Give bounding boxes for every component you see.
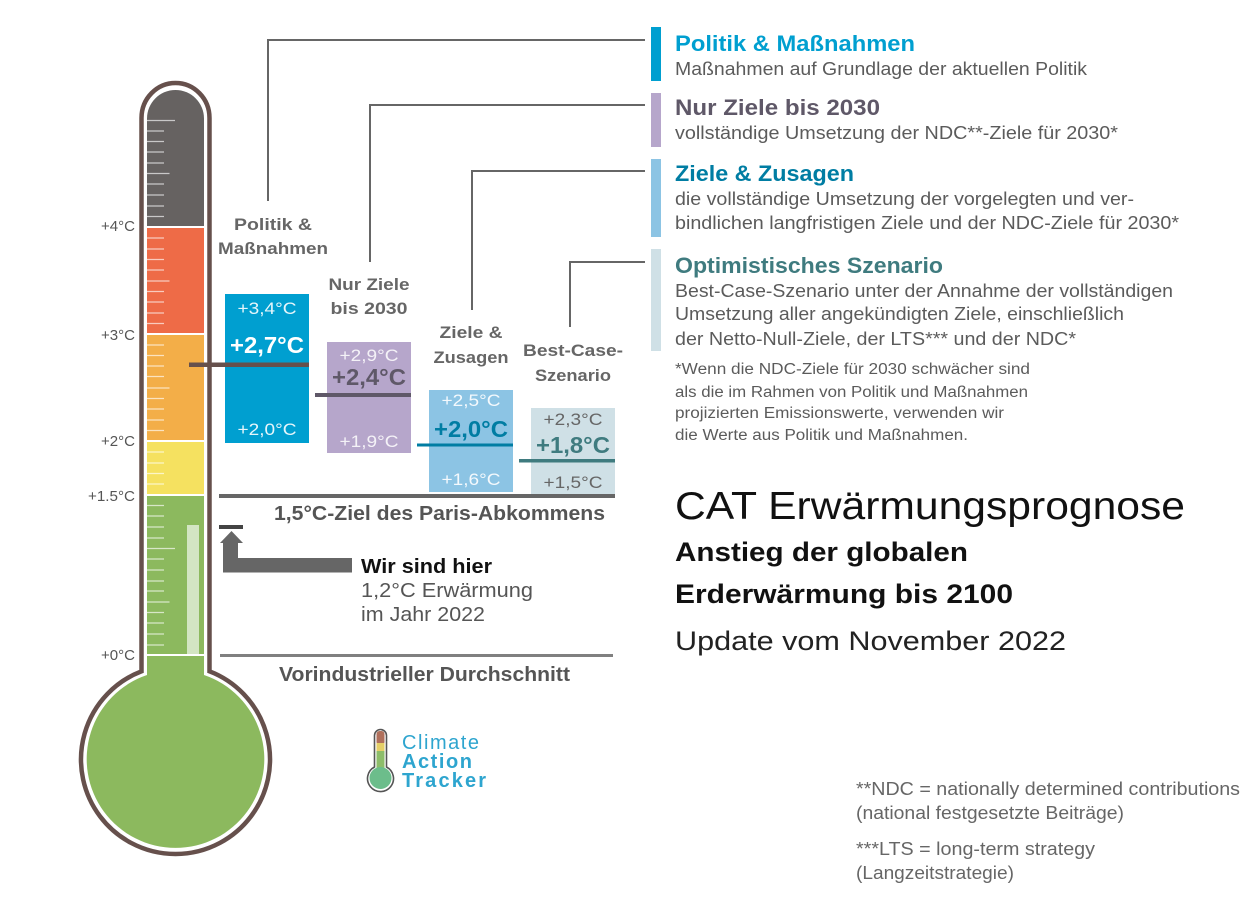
column heading: Nur Ziele bis 2030: bis 2030 <box>330 299 408 318</box>
title: CAT Erwärmungsprognose <box>675 485 1185 528</box>
column heading: Ziele & Zusagen <box>434 323 508 367</box>
bar: Optimistisches Szenario <box>519 408 615 496</box>
scale labels <box>88 218 135 664</box>
footnote: NDC targets <box>675 361 1030 444</box>
bar: Politik & Massnahmen <box>189 294 309 443</box>
legend: Politik & Massnahmen: Maßnahmen auf Grundlage der aktuellen Politik <box>675 59 1088 79</box>
legend: Ziele & Zusagen: bindlichen langfristigen Ziele und der NDC-Ziele für 2030* <box>675 213 1179 233</box>
leader lines <box>268 40 645 327</box>
Paris target line <box>219 494 615 498</box>
legend: Nur Ziele <box>651 93 1118 147</box>
bar: Optimistisches Szenario: +2,3°C <box>544 410 602 429</box>
column heading: Ziele & Zusagen: Ziele & <box>440 323 502 342</box>
footnote: LTS definition: (Langzeitstrategie) <box>856 863 1014 883</box>
thermometer <box>81 83 270 854</box>
bar: Nur Ziele: +1,9°C <box>340 432 398 451</box>
legend: Optimistisches Szenario <box>651 249 1173 351</box>
bar: Nur Ziele: +2,4°C <box>332 364 406 390</box>
segment: above 4 degrees <box>147 90 204 226</box>
column heading: Politik & Maßnahmen: Maßnahmen <box>218 239 328 258</box>
bar: Politik & Massnahmen: +3,4°C <box>238 299 296 318</box>
segment: 3 to 4 degrees <box>147 228 204 333</box>
segment: 2 to 3 degrees <box>147 335 204 440</box>
bar: Nur Ziele: +2,9°C <box>340 346 398 365</box>
column heading: Best-Case-Szenario: Best-Case- <box>523 341 623 360</box>
legend: Ziele & Zusagen: Ziele & Zusagen <box>675 161 854 186</box>
segment: 0 to 1.5 degrees <box>147 496 204 654</box>
footnote: NDC definition <box>856 779 1240 823</box>
bar: Ziele & Zusagen: +2,5°C <box>442 391 500 410</box>
footnote: NDC targets: als die im Rahmen von Politik und Maßnahmen <box>675 384 1028 401</box>
bar: Ziele & Zusagen <box>417 390 513 492</box>
logo wordmark: Action <box>402 751 472 773</box>
thermometer bulb <box>87 656 264 848</box>
column heading: Best-Case-Szenario: Szenario <box>535 366 611 385</box>
pre-industrial label: Vorindustrieller Durchschnitt <box>279 664 570 686</box>
scale labels: +0°C <box>101 647 135 664</box>
segment: 1.5 to 2 degrees <box>147 442 204 494</box>
bar: Politik & Massnahmen: +2,7°C <box>230 332 304 358</box>
logo icon <box>368 730 394 792</box>
tick marks <box>147 120 175 645</box>
footnote: NDC targets: *Wenn die NDC-Ziele für 2030 schwächer sind <box>675 361 1030 378</box>
pre-industrial line <box>220 654 613 657</box>
current warming marker <box>219 525 243 529</box>
bar: Ziele & Zusagen: +2,0°C <box>434 416 508 442</box>
logo wordmark: Climate <box>402 732 479 754</box>
legend: Optimistisches Szenario: Best-Case-Szenario unter der Annahme der vollständigen <box>675 281 1173 301</box>
scale labels: +2°C <box>101 433 135 450</box>
column heading: Nur Ziele bis 2030 <box>328 275 410 318</box>
bar: Optimistisches Szenario: +1,5°C <box>544 473 602 492</box>
column heading: Ziele & Zusagen: Zusagen <box>434 348 508 367</box>
current warming column <box>187 525 199 654</box>
column heading: Politik & Maßnahmen <box>218 215 328 258</box>
footnote: NDC targets: die Werte aus Politik und Maßnahmen. <box>675 427 968 444</box>
footnote: NDC definition: **NDC = nationally determined contributions <box>856 779 1240 799</box>
footnote: LTS definition: ***LTS = long-term strategy <box>856 839 1095 859</box>
subtitle: Anstieg der globalen <box>675 537 968 567</box>
subtitle <box>675 537 1013 609</box>
footnote: NDC definition: (national festgesetzte Beiträge) <box>856 803 1124 823</box>
column heading: Nur Ziele bis 2030: Nur Ziele <box>328 275 410 294</box>
logo wordmark: Tracker <box>402 770 486 792</box>
logo wordmark <box>402 732 486 792</box>
Paris target label: 1,5°C-Ziel des Paris-Abkommens <box>274 503 605 525</box>
bar: Politik & Massnahmen: +2,0°C <box>238 420 296 439</box>
legend: Optimistisches Szenario: Optimistisches Szenario <box>675 253 943 278</box>
bar: Ziele & Zusagen: +1,6°C <box>442 470 500 489</box>
footnote: LTS definition <box>856 839 1095 883</box>
legend: Nur Ziele: Nur Ziele bis 2030 <box>675 95 880 120</box>
scale labels: +1.5°C <box>88 488 135 505</box>
we are here text <box>361 556 533 626</box>
subtitle: Erderwärmung bis 2100 <box>675 579 1013 609</box>
legend: Optimistisches Szenario: Umsetzung aller angekündigten Ziele, einschließlich <box>675 304 1124 324</box>
we are here text: im Jahr 2022 <box>361 604 485 626</box>
scale labels: +3°C <box>101 327 135 344</box>
legend: Optimistisches Szenario: der Netto-Null-Ziele, der LTS*** und der NDC* <box>675 329 1076 349</box>
legend: Politik & Massnahmen <box>651 27 1088 81</box>
legend: Nur Ziele: vollständige Umsetzung der NDC**-Ziele für 2030* <box>675 123 1118 143</box>
legend: Ziele & Zusagen: die vollständige Umsetzung der vorgelegten und ver- <box>675 189 1134 209</box>
update date: Update vom November 2022 <box>675 626 1066 656</box>
bar: Optimistisches Szenario: +1,8°C <box>536 432 610 458</box>
footnote: NDC targets: projizierten Emissionswerte, verwenden wir <box>675 405 1004 422</box>
we are here text: Wir sind hier <box>361 556 492 578</box>
legend: Ziele & Zusagen <box>651 159 1179 237</box>
column heading: Best-Case-Szenario <box>523 341 623 385</box>
we are here text: 1,2°C Erwärmung <box>361 580 533 602</box>
scale labels: +4°C <box>101 218 135 235</box>
arrow: we are here <box>220 531 352 572</box>
column heading: Politik & Maßnahmen: Politik & <box>234 215 312 234</box>
logo: Climate Action Tracker <box>368 730 486 792</box>
bar: Nur Ziele <box>315 342 411 453</box>
legend: Politik & Massnahmen: Politik & Maßnahmen <box>675 31 915 56</box>
